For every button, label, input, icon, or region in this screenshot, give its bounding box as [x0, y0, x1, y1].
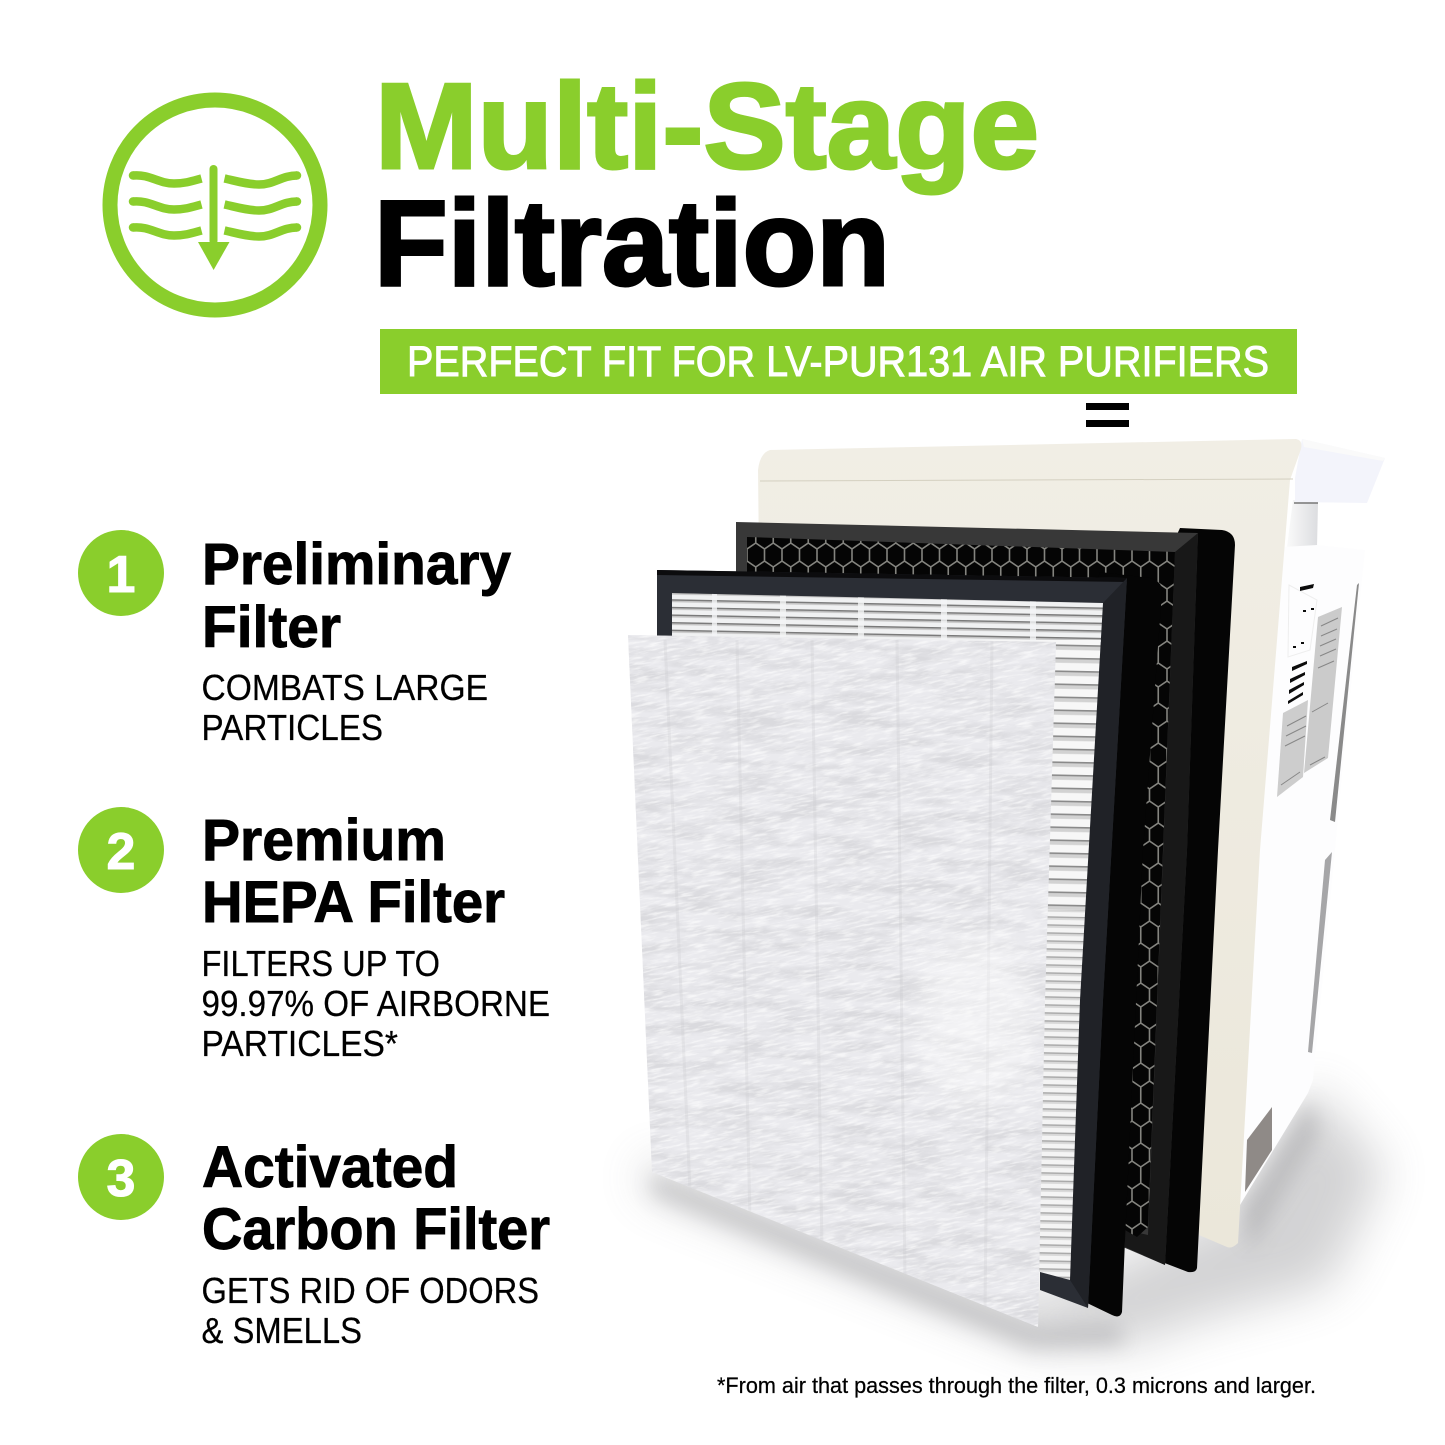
stage 1: preliminary filter: Preliminary [202, 532, 511, 597]
purifier unit [758, 439, 1385, 1248]
stage 1: preliminary filter: PARTICLES [202, 707, 383, 748]
stage 1: preliminary filter: 1 [107, 546, 135, 604]
stage 3: activated carbon filter: & SMELLS [202, 1310, 362, 1351]
banner: perfect fit [380, 329, 1297, 394]
purifier white side body [1220, 545, 1365, 1243]
icon: filtration circle with airflow waves and down arrow [110, 100, 320, 310]
stage 1: preliminary filter [78, 530, 511, 748]
HEPA black side [1060, 572, 1162, 1316]
stage 3: activated carbon filter: Activated [202, 1135, 458, 1200]
banner: perfect fit: PERFECT FIT FOR LV-PUR131 AIR PURIFIERS [407, 338, 1269, 386]
stage 3: activated carbon filter: GETS RID OF ODORS [202, 1270, 539, 1311]
preliminary filter sheet [628, 635, 1056, 1327]
carbon black side [1100, 528, 1235, 1272]
title [374, 58, 1039, 311]
stage 2: premium HEPA filter: Premium [202, 808, 446, 873]
carbon honeycomb [740, 530, 1190, 1250]
HEPA filter [657, 570, 1162, 1316]
stage 2: premium HEPA filter: 2 [107, 823, 135, 881]
carbon filter [736, 522, 1235, 1272]
equals sign [1086, 403, 1129, 427]
stage 2: premium HEPA filter [78, 807, 550, 1064]
stage 1: preliminary filter: COMBATS LARGE [202, 667, 488, 708]
purifier neck [1287, 500, 1318, 547]
stage 3: activated carbon filter: Carbon Filter [202, 1197, 550, 1262]
stage 1: preliminary filter: Filter [202, 595, 341, 660]
stage 2: premium HEPA filter: HEPA Filter [202, 870, 505, 935]
stage 3: activated carbon filter [78, 1134, 550, 1351]
title: Multi-Stage [375, 58, 1039, 194]
stage 2: premium HEPA filter: PARTICLES* [202, 1023, 398, 1064]
purifier lid side [1294, 439, 1385, 503]
purifier cream front [758, 439, 1301, 1248]
lid seam [760, 479, 1293, 481]
HEPA pleats [672, 593, 1103, 1280]
stage 2: premium HEPA filter: FILTERS UP TO [202, 943, 440, 984]
footnote: *From air that passes through the filter, 0.3 microns and larger. [717, 1373, 1316, 1398]
carbon frame [736, 522, 1198, 1265]
stage 3: activated carbon filter: 3 [107, 1150, 135, 1208]
HEPA frame [657, 570, 1127, 1308]
floor shadow [640, 1085, 1385, 1350]
title: Filtration [374, 175, 890, 311]
side labels and vents [1245, 583, 1359, 1192]
stage 2: premium HEPA filter: 99.97% OF AIRBORNE [202, 983, 550, 1024]
